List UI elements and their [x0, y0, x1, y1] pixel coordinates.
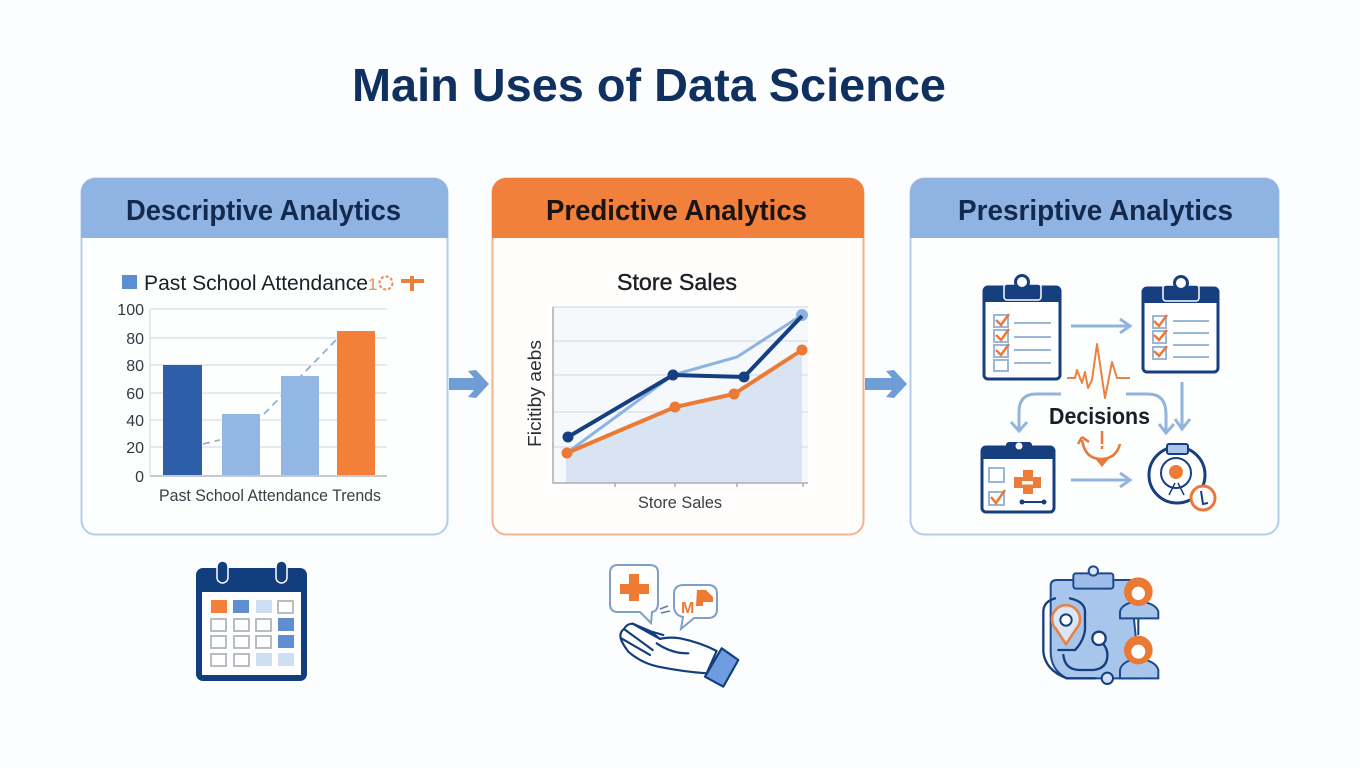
panel: descriptive analytics [81, 178, 448, 534]
hand [620, 624, 738, 687]
arrow: medical clipboard to person [1071, 473, 1130, 487]
y axis labels: 20 [126, 440, 144, 457]
icon: hand with speech bubbles [610, 565, 738, 687]
predictive header [492, 178, 864, 238]
person top [1120, 577, 1158, 618]
line chart: store sales [525, 269, 808, 512]
panel: prescriptive analytics [910, 178, 1279, 534]
calendar cells [211, 600, 294, 666]
icon: orange cycle [1078, 431, 1120, 465]
light blue series [568, 309, 808, 452]
arrow: clipboard one to two [1071, 319, 1130, 333]
orange series [562, 344, 808, 458]
icon: medical clipboard [982, 442, 1054, 512]
arrow: curved right [1126, 394, 1174, 433]
location pin [1052, 605, 1080, 644]
cuff [705, 648, 738, 687]
y axis labels: 100 [117, 302, 144, 319]
y axis labels: 80 [126, 331, 144, 348]
y axis label: Ficitiby aebs [525, 340, 545, 447]
icon: pulse line [1067, 344, 1130, 398]
predictive header: Predictive Analytics [546, 195, 807, 227]
decisions label: Decisions [1049, 403, 1150, 429]
chart title: Store Sales [617, 269, 737, 295]
chart legend: Past School Attendance [144, 271, 368, 295]
y axis labels [117, 302, 144, 486]
chart legend: 1 [368, 275, 377, 294]
arrow: descriptive to predictive [449, 370, 489, 398]
clipboard body [1051, 580, 1140, 678]
y axis labels: 0 [135, 469, 144, 486]
arrow: predictive to prescriptive [865, 370, 907, 398]
icon: person target [1149, 444, 1215, 510]
descriptive header: Descriptive Analytics [126, 195, 401, 227]
x axis label: Past School Attendance Trends [159, 487, 381, 505]
descriptive header [81, 178, 448, 238]
area fill [566, 350, 802, 483]
arrow: curved left [1011, 394, 1061, 431]
prescriptive header: Presriptive Analytics [958, 195, 1233, 227]
icon: calendar [196, 561, 307, 681]
bar chart: past school attendance [117, 271, 424, 505]
prescriptive header [910, 178, 1279, 238]
y axis labels: 40 [126, 413, 144, 430]
icon: stethoscope clipboard and people [1043, 566, 1158, 684]
person bottom [1120, 636, 1158, 678]
y axis labels: 60 [126, 386, 144, 403]
y axis labels: 80 [126, 358, 144, 375]
title: Main Uses of Data Science [352, 59, 946, 111]
bars [163, 331, 375, 475]
icon: clipboard one [984, 276, 1060, 379]
dark blue series [562, 316, 802, 442]
arrow: down right [1175, 382, 1190, 429]
icon: clipboard two [1143, 276, 1218, 372]
panel: predictive analytics [492, 178, 864, 534]
bubble: orange symbols: M [681, 600, 694, 617]
stethoscope [1043, 598, 1107, 678]
bubble: medical cross [610, 565, 658, 623]
x axis label: Store Sales [638, 494, 722, 512]
